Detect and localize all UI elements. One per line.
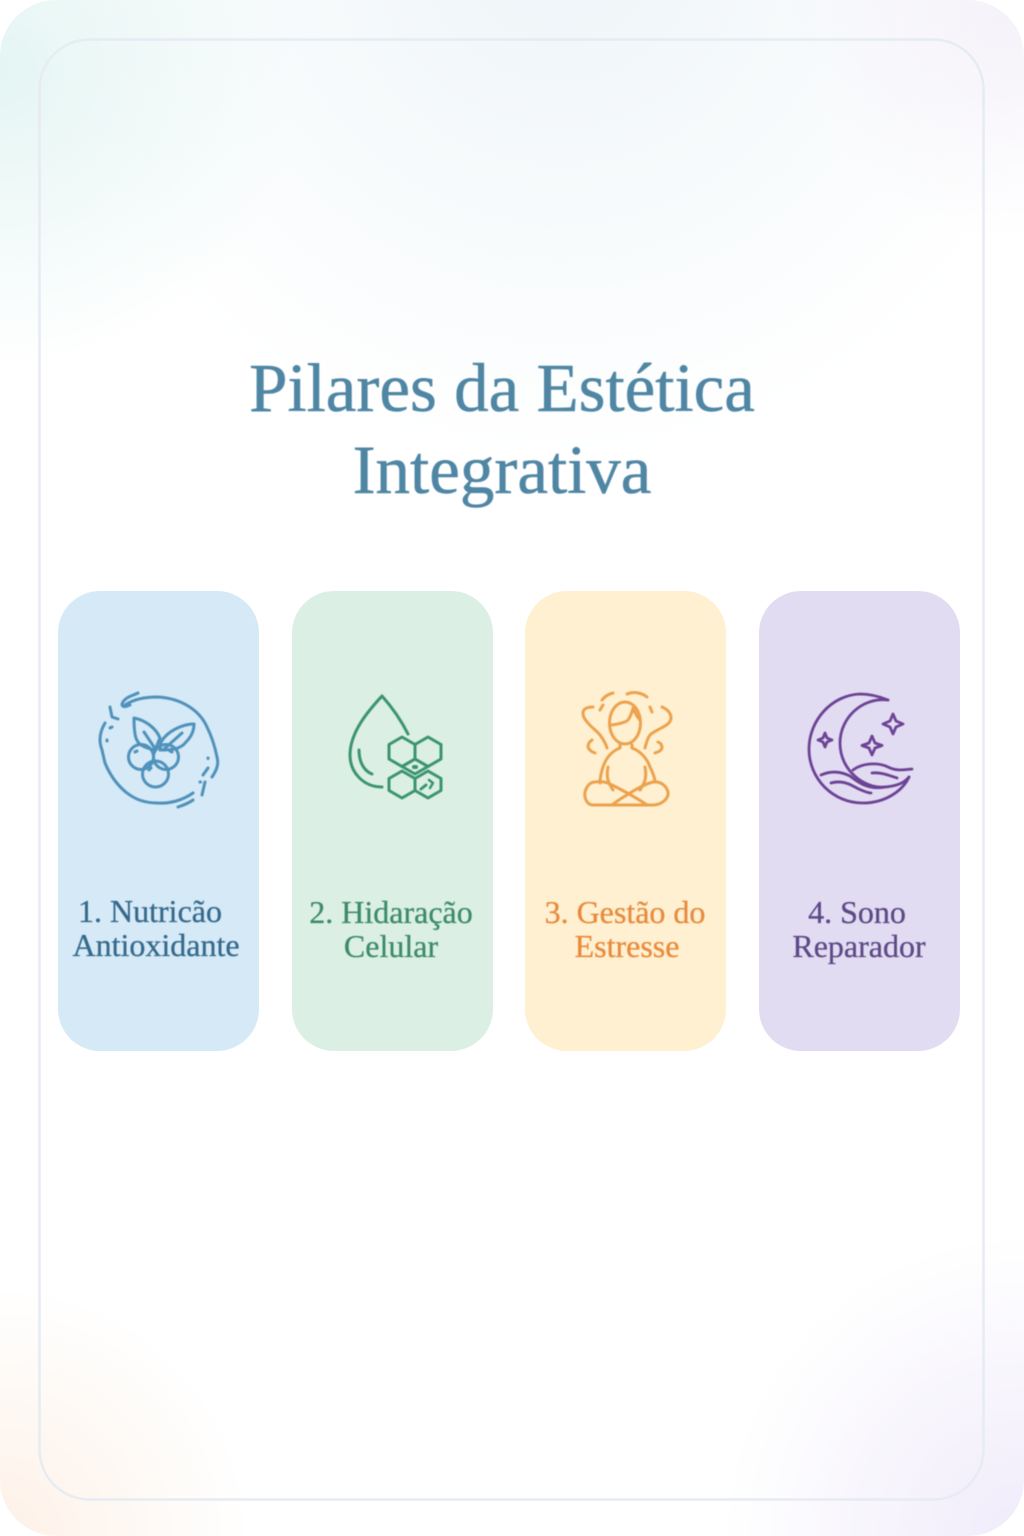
label: Antioxidante (72, 927, 240, 963)
title: Integrativa (353, 432, 651, 508)
icon: meditating person (583, 693, 671, 805)
label (545, 894, 705, 964)
icon: water drop with honeycomb (350, 696, 441, 798)
label (309, 894, 473, 964)
label (72, 893, 240, 963)
label (792, 894, 926, 964)
panel: 3. Gestão do Estresse (525, 591, 726, 1051)
title (249, 350, 755, 508)
icon: crescent moon with stars and waves (809, 694, 912, 803)
label: 3. Gestão do (545, 894, 705, 930)
panel: 1. Nutricão Antioxidante (58, 591, 259, 1051)
title: Pilares da Estética (249, 350, 755, 426)
label: 2. Hidaração (309, 894, 473, 930)
label: Reparador (792, 928, 926, 964)
panel: 4. Sono Reparador (759, 591, 960, 1051)
label: 4. Sono (808, 894, 906, 930)
label: Estresse (575, 928, 679, 964)
label: 1. Nutricão (78, 893, 222, 929)
label: Celular (344, 928, 438, 964)
panel: 2. Hidaração Celular (292, 591, 493, 1051)
icon: berries with leaves in a circle (100, 693, 218, 807)
